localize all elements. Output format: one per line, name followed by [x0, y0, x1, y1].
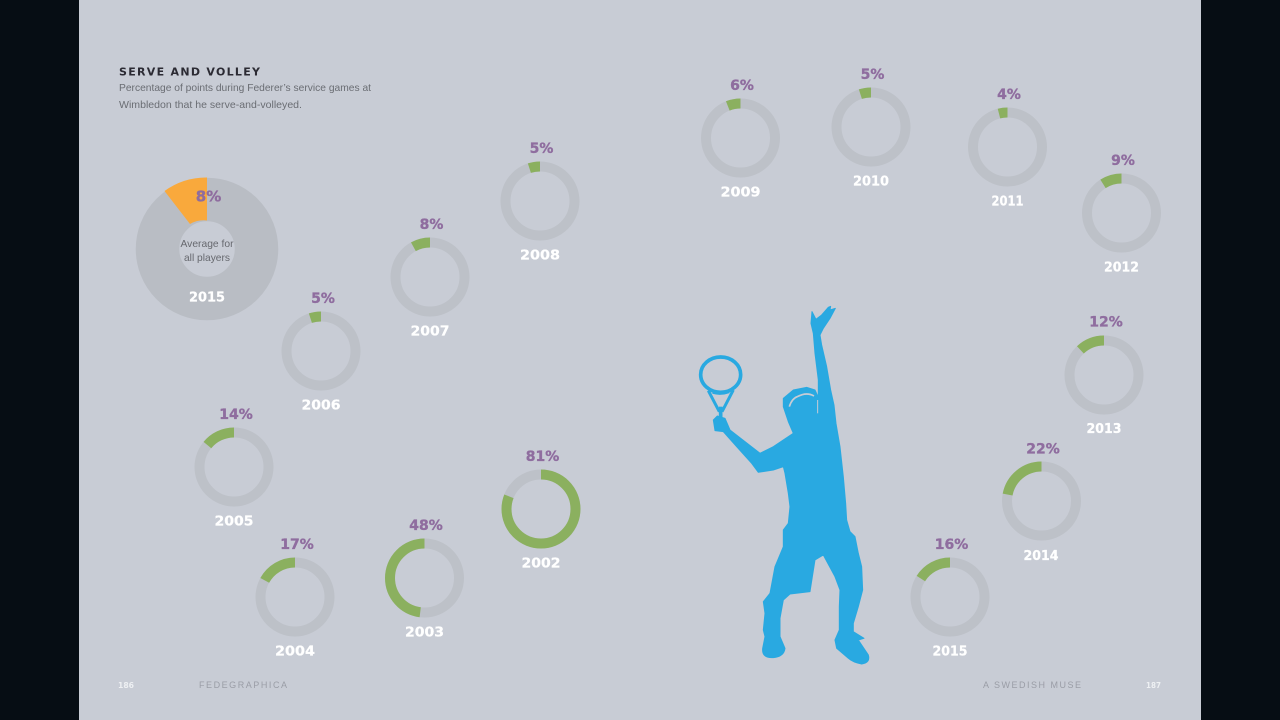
donut 2014: 22%: 2014 [1024, 549, 1058, 564]
donut 2014: 22%: 22% [1026, 442, 1060, 458]
donut 2006: 5% [286, 291, 356, 414]
footer right: section name: A SWEDISH MUSE [983, 680, 1081, 690]
donut 2005: 14% [200, 407, 268, 530]
donut 2015: 16% [916, 537, 984, 660]
footer right: page number: 187 [1146, 681, 1161, 690]
donut 2008: 5% [506, 141, 574, 264]
donut 2011: 4%: 2011 [992, 194, 1024, 210]
donut 2007: 8% [396, 217, 464, 340]
icon: tennis player silhouette serving [701, 306, 869, 664]
donut 2015: 16%: 16% [935, 537, 968, 553]
donut 2008: 5%: 5% [530, 141, 553, 157]
donut 2005: 14%: 14% [219, 407, 253, 423]
pie caption: Average for [180, 238, 234, 250]
donut 2009: 6% [706, 78, 775, 200]
donut 2013: 12%: 2013 [1086, 422, 1122, 437]
pie: average for all players 2015 [158, 177, 256, 306]
donut 2003: 48% [390, 518, 459, 640]
donut 2013: 12%: 12% [1089, 314, 1123, 330]
donut 2010: 5%: 5% [861, 67, 884, 83]
donut 2007: 8%: 8% [420, 217, 443, 233]
donut 2012: 9%: 2012 [1104, 260, 1139, 276]
pie caption: all players [184, 252, 230, 264]
donut 2012: 9%: 9% [1111, 153, 1135, 169]
body [713, 306, 869, 664]
donut 2003: 48%: 48% [409, 518, 443, 534]
donut 2012: 9% [1087, 153, 1156, 276]
donut 2009: 6%: 2009 [720, 186, 760, 200]
description text: Wimbledon that he serve-and-volleyed. [119, 99, 302, 111]
orange wedge [164, 177, 207, 224]
footer left: section name: FEDEGRAPHICA [199, 680, 287, 690]
donut 2002: 81%: 81% [526, 449, 559, 465]
donut 2005: 14%: 2005 [214, 514, 254, 530]
donut 2008: 5%: 2008 [520, 248, 560, 264]
donut 2004: 17%: 17% [280, 537, 314, 553]
donut 2004: 17% [260, 537, 330, 660]
donut 2006: 5%: 5% [311, 291, 335, 307]
donut 2003: 48%: 2003 [405, 626, 444, 640]
donut 2011: 4%: 4% [997, 87, 1021, 103]
donut 2010: 5%: 2010 [853, 174, 889, 190]
donut 2007: 8%: 2007 [410, 324, 450, 340]
donut 2004: 17%: 2004 [275, 644, 315, 660]
donut 2002: 81%: 2002 [522, 556, 560, 572]
donut 2006: 5%: 2006 [302, 398, 340, 414]
pie year: 2015 [189, 290, 225, 306]
pie caption [180, 238, 234, 264]
footer left: page number: 186 [118, 681, 134, 690]
donut 2014: 22% [1007, 442, 1076, 564]
donut 2002: 81% [506, 449, 576, 572]
donut 2013: 12% [1070, 314, 1138, 437]
donut 2009: 6%: 6% [730, 78, 754, 94]
arm gap highlight [816, 400, 819, 413]
racket [701, 357, 741, 421]
title: SERVE AND VOLLEY [119, 66, 261, 78]
donut 2011: 4% [973, 87, 1042, 210]
donut 2015: 16%: 2015 [932, 644, 968, 660]
description text [119, 82, 371, 111]
description text: Percentage of points during Federer’s service games at [119, 82, 371, 94]
pie percentage: 8% [196, 188, 221, 206]
donut 2010: 5% [836, 67, 906, 190]
headband highlight [789, 394, 814, 407]
